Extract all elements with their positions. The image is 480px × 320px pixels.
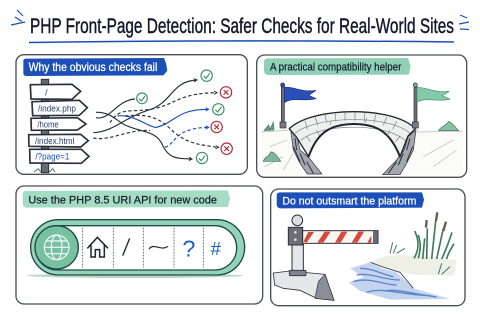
stone arch bridge [289, 112, 415, 157]
green flag [412, 83, 450, 128]
heading: use the PHP 8.5 URI API [23, 190, 230, 208]
panel: why the obvious checks fail [16, 55, 247, 174]
question mark: ? [182, 235, 195, 261]
panel: use the PHP 8.5 URI API [16, 186, 263, 304]
panel: a practical compatibility helper [257, 55, 467, 177]
path separator [123, 238, 130, 256]
tilde [149, 246, 168, 249]
left cliff [260, 129, 322, 174]
hash: # [211, 238, 222, 259]
heading: why the obvious checks fail: Why the obvious checks fail [29, 61, 157, 74]
panel: do not outsmart the platform [271, 189, 465, 306]
river bank [371, 255, 457, 288]
blue flag [280, 83, 316, 128]
grass tufts [263, 121, 459, 161]
URI pill bar [27, 220, 245, 278]
status icons: checks and crosses [137, 70, 232, 164]
heading: do not outsmart the platform: Do not outsmart the platform [282, 195, 416, 207]
icon: signpost with URL paths: /index.html [35, 136, 74, 146]
title [11, 10, 469, 42]
icon: signpost with URL paths: /index.php [38, 103, 76, 113]
icon: signpost with URL paths: /home [37, 119, 59, 129]
barrier gate [273, 215, 378, 300]
heading: use the PHP 8.5 URI API: Use the PHP 8.5 URI API for new code [28, 194, 217, 206]
icon: signpost with URL paths: / [45, 87, 48, 97]
right cliff [383, 129, 463, 175]
routes: tangled arrows [93, 80, 218, 159]
reeds [390, 212, 454, 274]
icon: signpost with URL paths [29, 79, 89, 173]
heading: a practical compatibility helper [264, 58, 411, 75]
icon: globe [35, 226, 78, 269]
heading: a practical compatibility helper: A practical compatibility helper [270, 62, 402, 74]
heading: why the obvious checks fail [23, 58, 167, 76]
dividers [83, 228, 203, 268]
river [349, 262, 450, 300]
icon: signpost with URL paths: /?page=1 [35, 151, 69, 161]
icon: home [87, 237, 108, 257]
